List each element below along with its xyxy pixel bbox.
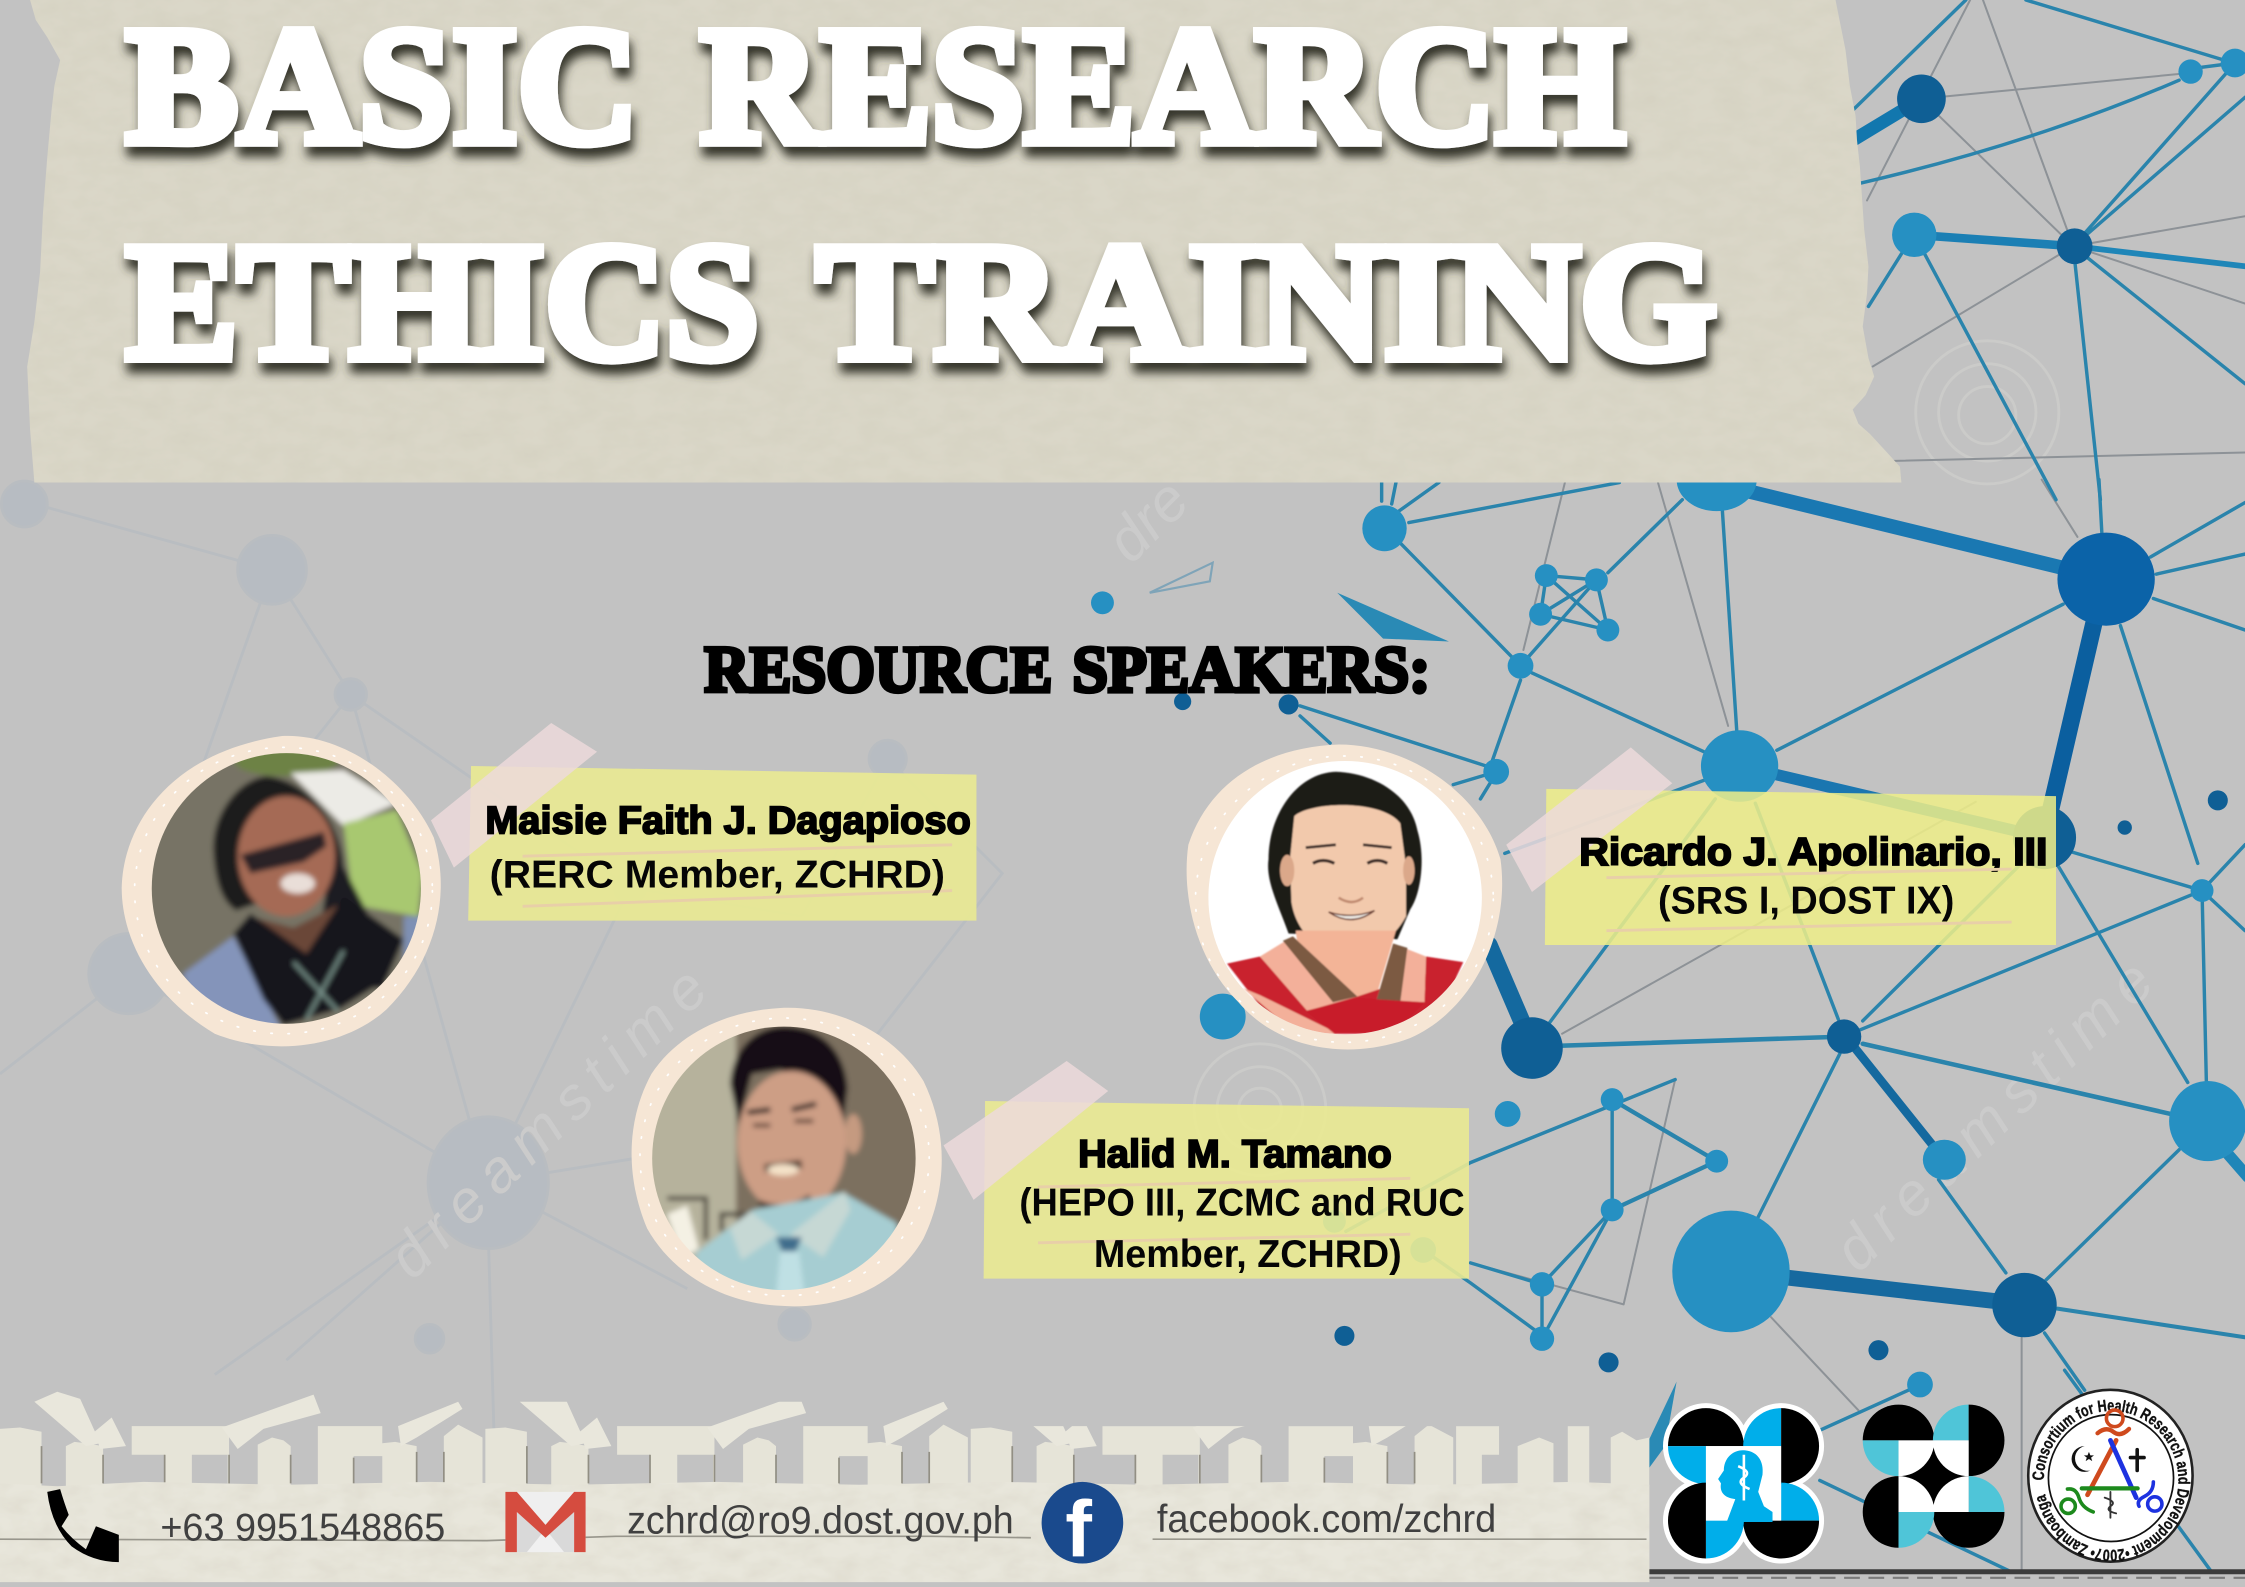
watermarks: dreamstime (375, 954, 720, 1291)
torn fence strip (0, 1392, 1649, 1486)
title: ETHICS (126, 210, 759, 395)
ring text: Consortium for Health Research and Development •2007• Zamboanga (2032, 1400, 2191, 1562)
photo ring speckle (135, 747, 432, 1034)
panel: torn paper footer (0, 1392, 1649, 1582)
heading: resource speakers: RESOURCE (704, 634, 1052, 707)
photo (152, 753, 421, 1024)
role: (HEPO III, ZCMC and RUC (1019, 1182, 1465, 1225)
role: (RERC Member, ZCHRD) (490, 854, 945, 897)
speaker: Maisie Faith J. Dagapioso (122, 723, 976, 1046)
heading: resource speakers (704, 634, 1430, 707)
blue connections (1300, 0, 2245, 1571)
gray connections (1470, 0, 2245, 1571)
icon: phone (47, 1489, 119, 1562)
underline (1606, 869, 2012, 931)
photo ring speckle (1196, 756, 1493, 1042)
network graphic (1150, 0, 2245, 1571)
photo ring (1187, 745, 1502, 1049)
name: Halid M. Tamano (1078, 1133, 1392, 1176)
star (2084, 1452, 2094, 1461)
email address: zchrd@ro9.dost.gov.ph (627, 1499, 1014, 1542)
role: (SRS I, DOST IX) (1658, 879, 1954, 922)
icon: gmail (505, 1492, 586, 1552)
tape (431, 723, 597, 868)
thick links (1489, 99, 2245, 1304)
watermarks (375, 341, 2166, 1291)
name: Maisie Faith J. Dagapioso (485, 799, 971, 842)
small triangles (1150, 563, 1213, 593)
bottom dashed rule (1649, 1569, 2245, 1578)
tape (1506, 747, 1672, 892)
strip body (0, 1482, 1649, 1582)
photo ring (632, 1008, 942, 1306)
photo (652, 1026, 916, 1290)
title (126, 0, 1717, 395)
speaker: Ricardo J. Apolinario, III (1187, 745, 2056, 1049)
speaker: Halid M. Tamano: Member, ZCHRD) (1094, 1233, 1402, 1276)
photo ring speckle (640, 1018, 929, 1296)
tape (944, 1061, 1108, 1200)
note background (984, 1101, 1469, 1279)
underline (1038, 1178, 1410, 1243)
watermarks: dre (1093, 466, 1202, 575)
note background (1545, 789, 2056, 945)
logo: DOH (1663, 1403, 1824, 1564)
crescent (2072, 1446, 2090, 1472)
photo ring (122, 736, 441, 1046)
writing line (0, 1536, 1647, 1541)
faint background network (0, 481, 1002, 1432)
note background (468, 766, 976, 921)
phone number: +63 9951548865 (160, 1507, 445, 1550)
triangle emblem (2061, 1410, 2162, 1518)
facebook address: facebook.com/zchrd (1157, 1498, 1496, 1541)
logo: Zamboanga Consortium (2026, 1388, 2194, 1563)
panel: torn paper title (27, 0, 1901, 483)
logo: DOST (1863, 1405, 2004, 1548)
network nodes (1091, 49, 2245, 1397)
title: TRAINING (816, 210, 1717, 395)
underline (523, 845, 952, 906)
watermarks: dreamstime (1821, 947, 2166, 1284)
icon: facebook (1042, 1482, 1123, 1573)
photo (1203, 756, 1489, 1039)
speaker: Halid M. Tamano (632, 1008, 1469, 1306)
icon: facebook: f (1065, 1483, 1092, 1573)
heading: resource speakers: SPEAKERS: (1072, 634, 1430, 707)
name: Ricardo J. Apolinario, III (1579, 831, 2047, 874)
